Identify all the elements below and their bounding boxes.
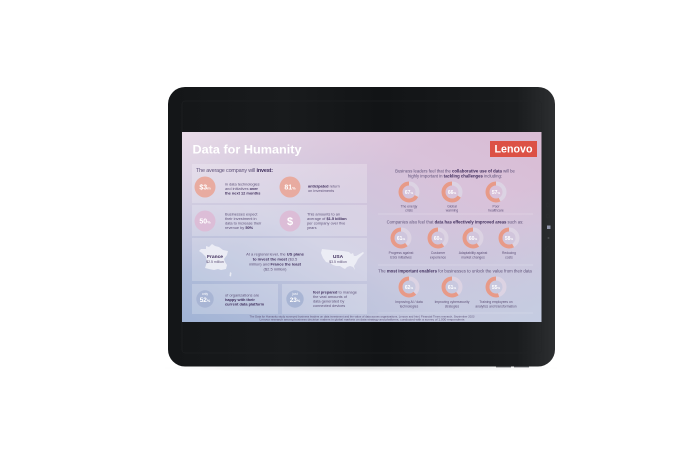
text: revenue: their investment in — [225, 216, 257, 221]
stat: 23%: just — [291, 292, 298, 296]
text: regional: to invest the most — [253, 256, 288, 262]
text: revenue: Businesses expect — [225, 212, 257, 216]
label: reducing costs: costs — [505, 255, 513, 259]
stat: 23%: 23% — [290, 297, 301, 304]
stat: 23% — [286, 290, 304, 308]
label: training: analytics and transformation — [475, 304, 517, 308]
label: energy crisis: The energy — [401, 204, 417, 208]
stat: 52%: only — [202, 292, 208, 296]
logo: Lenovo — [490, 141, 537, 157]
donut: 62%: 62% — [405, 285, 413, 291]
label: training: Training employees on — [479, 300, 513, 304]
label: France: France — [207, 254, 223, 260]
donut: 61%: 61% — [448, 285, 456, 291]
text: prepared: data generated by — [313, 298, 344, 304]
icon: dollar — [280, 210, 300, 232]
text: regional: At a regional level, the US plans — [246, 252, 304, 256]
stat: 52%: 52% — [200, 297, 211, 304]
heading: improved areas: Companies also feel that data has effectively improved areas such as: — [387, 220, 523, 224]
text: average: This amounts to an — [307, 212, 340, 216]
panel: revenue — [192, 205, 367, 236]
text: average: average of — [307, 216, 326, 221]
text: prepared: the vast amounts of — [313, 294, 348, 299]
screen background — [182, 132, 542, 322]
stat: 81%: 81% — [284, 184, 296, 192]
label: poor healthcare: Poor — [493, 204, 499, 208]
section: collaborative use of data — [395, 168, 516, 213]
donut: 55%: 55% — [492, 285, 500, 291]
label: customer experience: experience — [430, 255, 446, 259]
donut: 61%: 61% — [397, 236, 405, 242]
footnote: Lenovo research among business decision makers in global markets on data strategy and platforms, conducted with a survey of 1,000 respondents — [260, 318, 466, 322]
donut: 57%: 57% — [492, 190, 500, 196]
donut: 62% — [400, 278, 418, 296]
label: adaptability: Adaptability against — [459, 251, 487, 255]
text: organizations: of organizations are — [225, 292, 259, 298]
stat: $3m — [194, 176, 216, 198]
logo: Lenovo: Lenovo — [494, 144, 533, 156]
stat: $3m: $3m — [199, 184, 211, 192]
section: improved areas — [387, 220, 523, 259]
label: poor healthcare: healthcare — [488, 209, 504, 213]
heading: average company invests: The average company will invest: — [196, 168, 273, 174]
map: France — [199, 244, 232, 276]
panel: regional — [192, 238, 367, 281]
text: regional: France the least — [271, 262, 302, 266]
donut: 67%: 67% — [405, 190, 413, 196]
text: return: on investments — [308, 188, 334, 193]
text: technologies: and initiatives — [225, 186, 250, 191]
text: technologies: in data technologies — [225, 182, 260, 186]
stat: 50%: 50% — [199, 218, 211, 226]
label: adaptability: market changes — [461, 255, 485, 259]
text: average: years — [307, 225, 317, 230]
donut: 58%: 58% — [505, 236, 513, 242]
donut: 60% customer: 60% — [434, 236, 442, 242]
text: regional: ($2.5 million) — [264, 266, 287, 272]
text: revenue: 50% — [245, 225, 254, 230]
text: technologies: the next 12 months — [225, 190, 260, 196]
text: revenue: data to increase their — [225, 220, 262, 226]
label: AI: technologies — [400, 304, 419, 308]
text: organizations: current data platform — [225, 302, 265, 307]
donut: 60% adaptability: 60% — [469, 236, 477, 242]
label: USA: USA — [333, 254, 344, 260]
label: reducing costs: Reducing — [502, 251, 516, 255]
tablet device — [161, 87, 561, 372]
label: global warming: Global — [447, 204, 457, 208]
donut: 66%: 66% — [448, 190, 456, 196]
text: revenue: revenue by — [225, 225, 245, 230]
footnote: The Data for Humanity study surveyed business leaders on data investment and the value of data across organizations, Lenovo and Intel, Financial Times research, September 2023 — [250, 316, 475, 318]
stat: 81% — [280, 176, 300, 198]
label: ESG: ESG initiatives — [390, 255, 412, 259]
heading: collaborative: tackling challenges including: — [444, 174, 502, 178]
label: ESG: Progress against — [389, 251, 413, 255]
heading: collaborative: highly important in — [408, 174, 444, 178]
panel: prepared — [282, 284, 367, 314]
stat: 50% — [194, 210, 216, 232]
text: technologies: over — [250, 186, 258, 191]
label: AI: Improving AI / data — [395, 300, 423, 304]
text: organizations: happy with their — [225, 297, 255, 302]
text: average: per company over five — [307, 220, 345, 226]
panel: investment — [192, 164, 367, 203]
text: average: $1.5 billion — [326, 216, 347, 221]
icon: dollar: $ — [287, 216, 293, 228]
footnote — [250, 316, 475, 322]
label: global warming: warming — [446, 209, 458, 213]
label: cybersecurity: strategies — [445, 304, 459, 308]
label: cybersecurity: Improving cybersecurity — [435, 300, 469, 304]
text: prepared: connected devices — [313, 303, 345, 308]
text: regional: million) and — [249, 262, 271, 266]
heading: enablers: The most important enablers for businesses to unlock the value from their data — [378, 268, 532, 274]
heading: collaborative: Business leaders feel that the collaborative use of data will be — [395, 168, 515, 174]
text: return: anticipated return — [308, 184, 340, 188]
title: Data for Humanity — [192, 144, 302, 156]
section: enablers — [378, 268, 532, 308]
stat: 52% — [196, 290, 214, 308]
text: regional: ($3.5 — [288, 256, 297, 262]
text: prepared: feel prepared to manage — [313, 289, 357, 294]
map: USA — [321, 249, 364, 270]
panel: happy with platform — [192, 284, 278, 314]
map: France: $2.5 million — [206, 260, 224, 264]
donut: 55% — [488, 278, 504, 296]
donut: 61% — [444, 278, 460, 296]
map: USA: $3.5 million — [329, 260, 347, 264]
label: energy crisis: crisis — [405, 209, 413, 213]
label: customer experience: Customer — [431, 251, 445, 255]
